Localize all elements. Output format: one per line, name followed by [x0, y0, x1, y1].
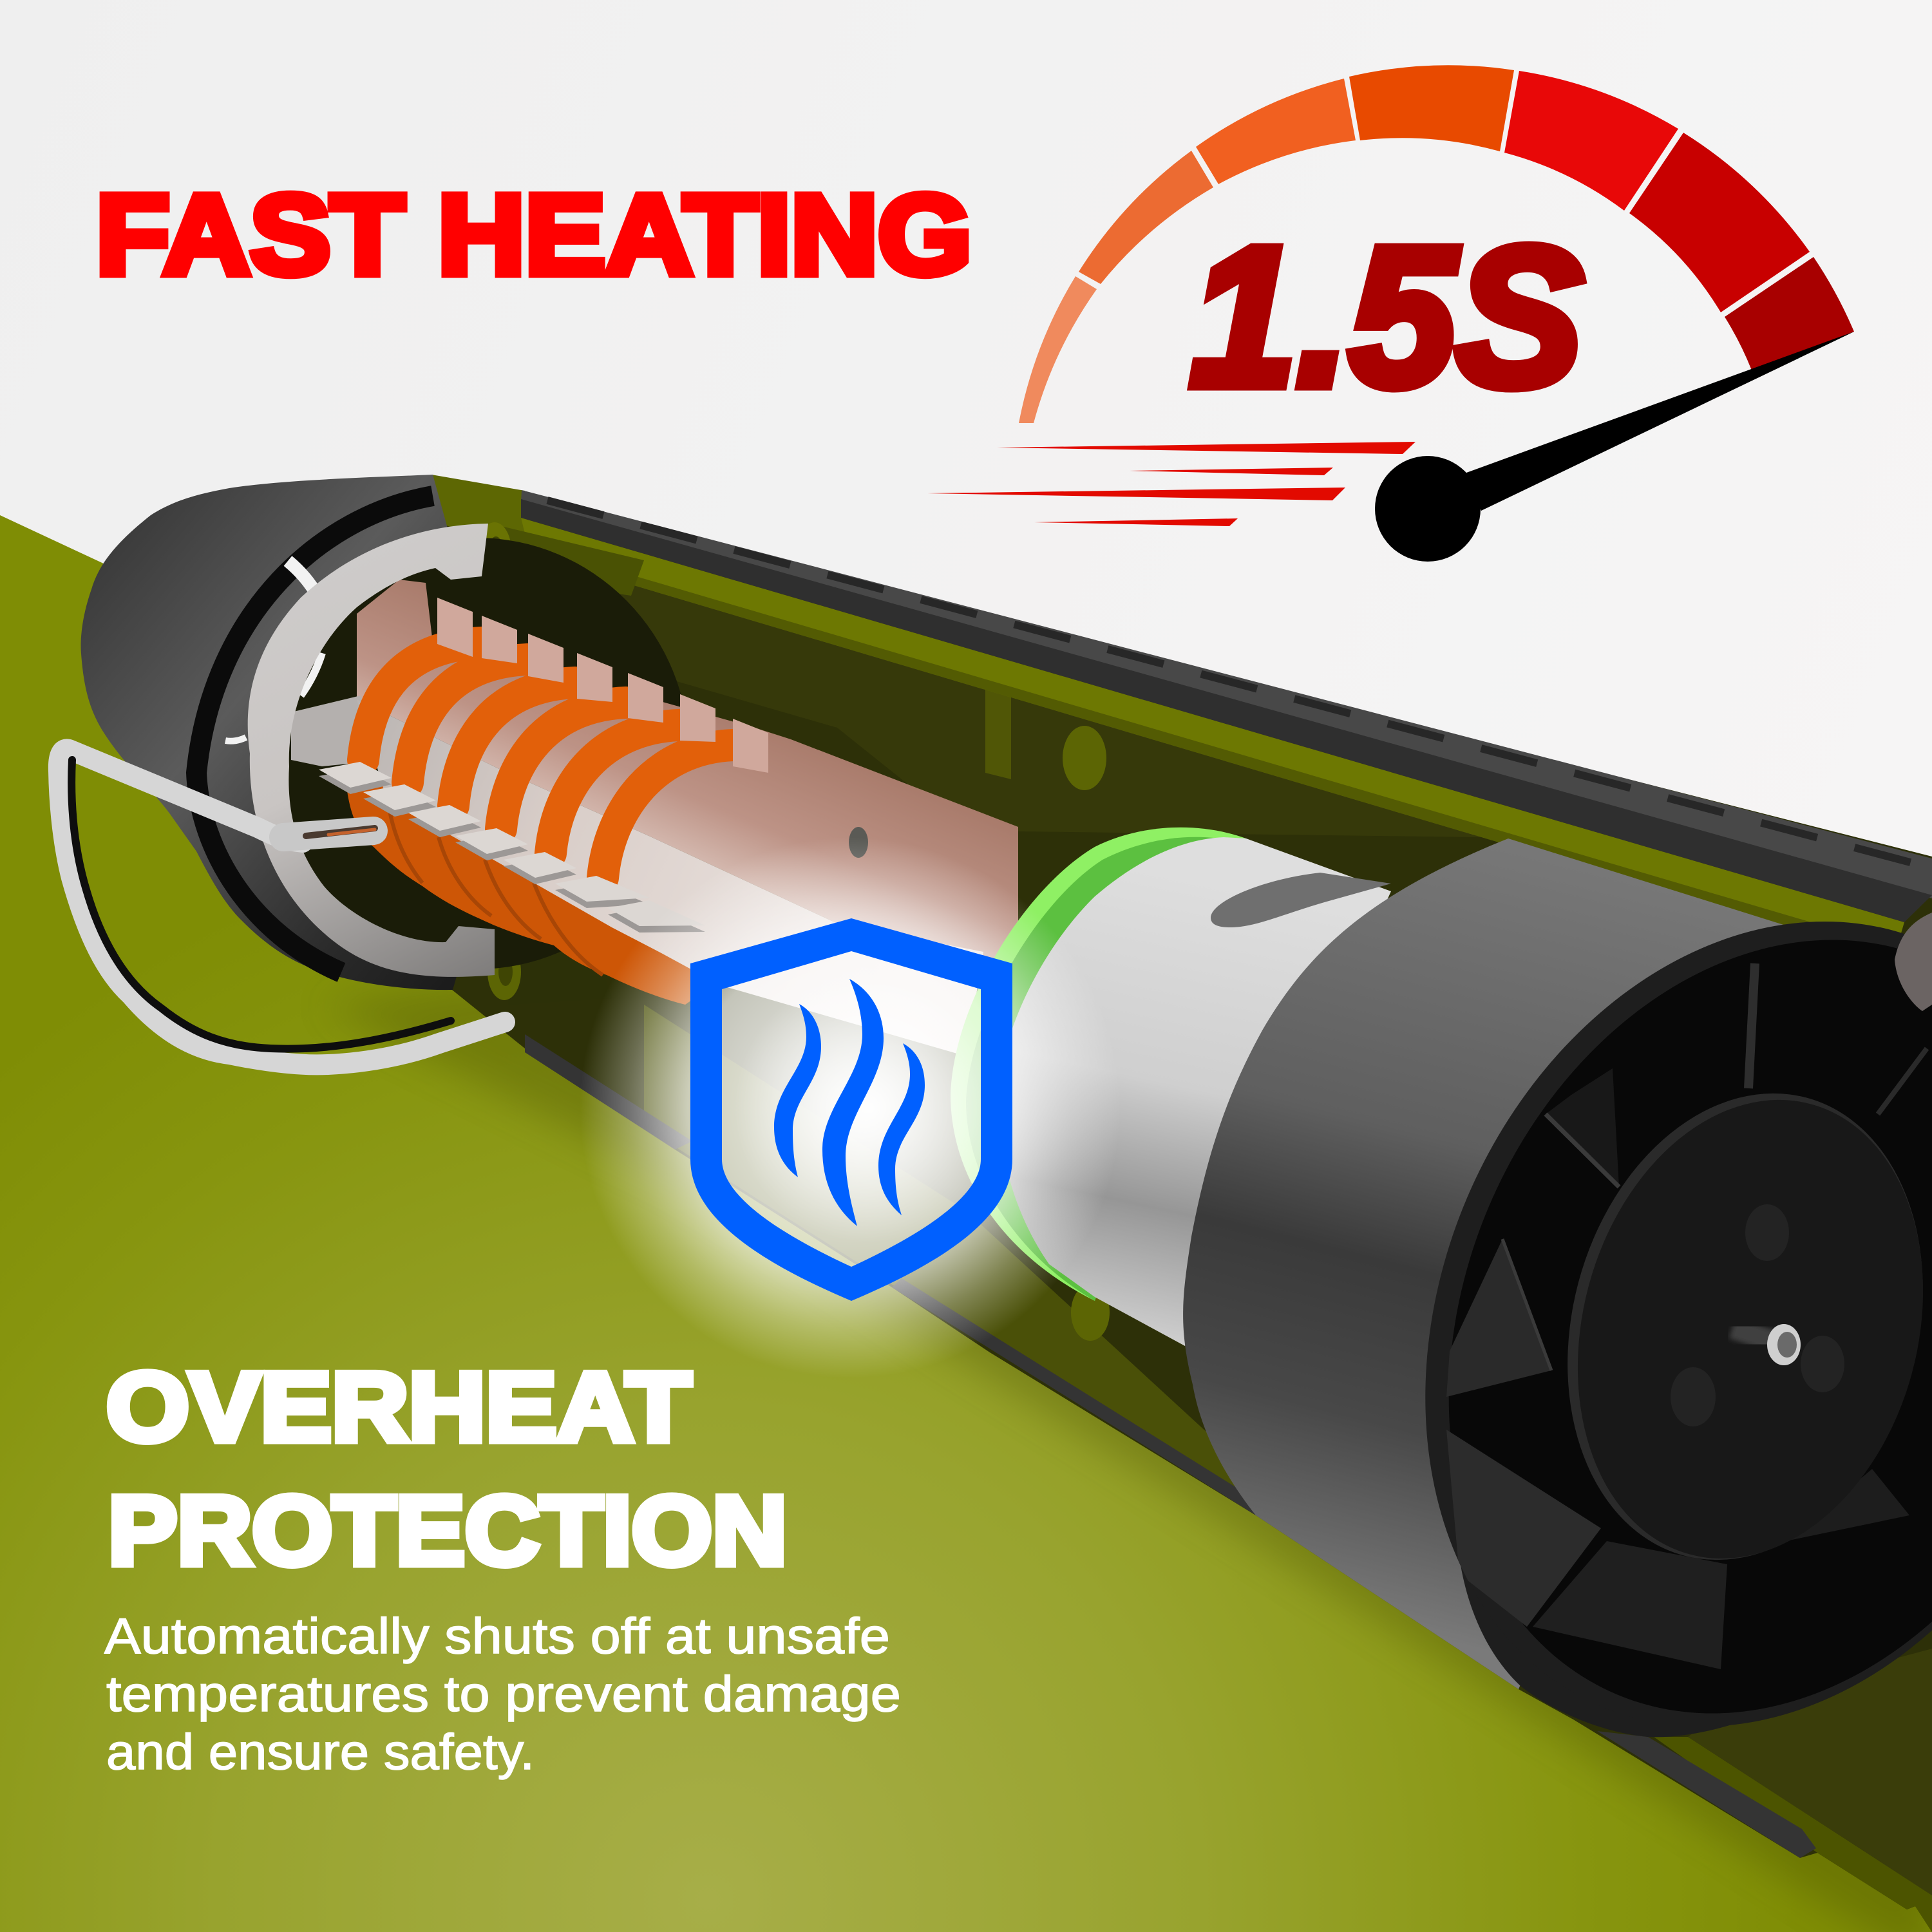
lower coil mass — [347, 773, 741, 1005]
description text: and ensure safety. — [106, 1723, 535, 1780]
motor — [951, 828, 1391, 1346]
heading: overheat protection: PROTECTION — [108, 1476, 787, 1586]
green ring inner tone — [966, 837, 1246, 1301]
title: fast heating: FAST HEATING — [96, 172, 972, 298]
background: olive green diagonal panel — [0, 515, 1932, 1932]
fan hub — [1517, 1053, 1932, 1600]
upper rim: dark textured strip — [521, 499, 1932, 922]
heading: overheat protection: OVERHEAT — [106, 1352, 691, 1462]
plate hole — [849, 827, 868, 858]
fan rim — [1305, 816, 1932, 1832]
description text: Automatically shuts off at unsafe — [104, 1607, 890, 1664]
gauge: 1.5S speedometer — [927, 65, 1854, 562]
vertical copper plate — [357, 580, 1018, 966]
shield centre highlight — [734, 972, 1005, 1243]
gauge value: 1.5S — [1190, 206, 1584, 428]
housing interior — [431, 475, 1932, 1932]
heading: overheat protection — [106, 1352, 787, 1586]
product: cutaway hair dryer — [59, 475, 1932, 1932]
shield glow — [580, 837, 1121, 1378]
upper rim: olive band shade — [527, 544, 1899, 960]
grey solder tabs — [319, 762, 705, 926]
pale horizontal plate — [357, 699, 983, 1056]
heater element — [291, 580, 1018, 1056]
grey solder tab edges — [319, 768, 705, 933]
power cord — [59, 749, 505, 1065]
orange coil bands — [363, 643, 733, 878]
heat wave middle — [822, 979, 884, 1226]
motor shaft pin — [1732, 1324, 1801, 1365]
description text: temperatures to prevent damage — [106, 1665, 901, 1722]
fan blades — [1446, 963, 1927, 1669]
description text — [104, 1607, 901, 1780]
shield outline — [690, 918, 1012, 1301]
inner bracket plate — [291, 696, 386, 766]
motor can — [998, 837, 1391, 1346]
heat wave left — [774, 1004, 821, 1177]
fan rim lower lip — [1461, 1546, 1777, 1737]
gauge needle — [1375, 332, 1854, 562]
upper rim: olive cap piece — [431, 475, 530, 554]
green mount ring — [951, 828, 1246, 1301]
gauge segments — [1019, 65, 1854, 423]
upper rim: grey grip strip with dashes — [521, 490, 1932, 898]
icon: blue shield with heat waves — [690, 918, 1012, 1301]
fan interior — [1333, 839, 1932, 1814]
silver retaining ring — [248, 524, 495, 977]
product drop shadow — [322, 966, 1932, 1932]
lower rim dark strips — [525, 1034, 1816, 1858]
right-side connector — [1895, 913, 1932, 1011]
end cap — [81, 475, 689, 990]
fan housing — [1183, 838, 1792, 1689]
motor slot — [1211, 873, 1391, 927]
speed lines — [927, 442, 1416, 526]
heat wave right — [878, 1043, 925, 1215]
copper tabs — [437, 598, 768, 773]
upper rim: olive band — [521, 518, 1904, 960]
mounting bosses — [478, 522, 1932, 1341]
fan — [1183, 838, 1932, 1738]
